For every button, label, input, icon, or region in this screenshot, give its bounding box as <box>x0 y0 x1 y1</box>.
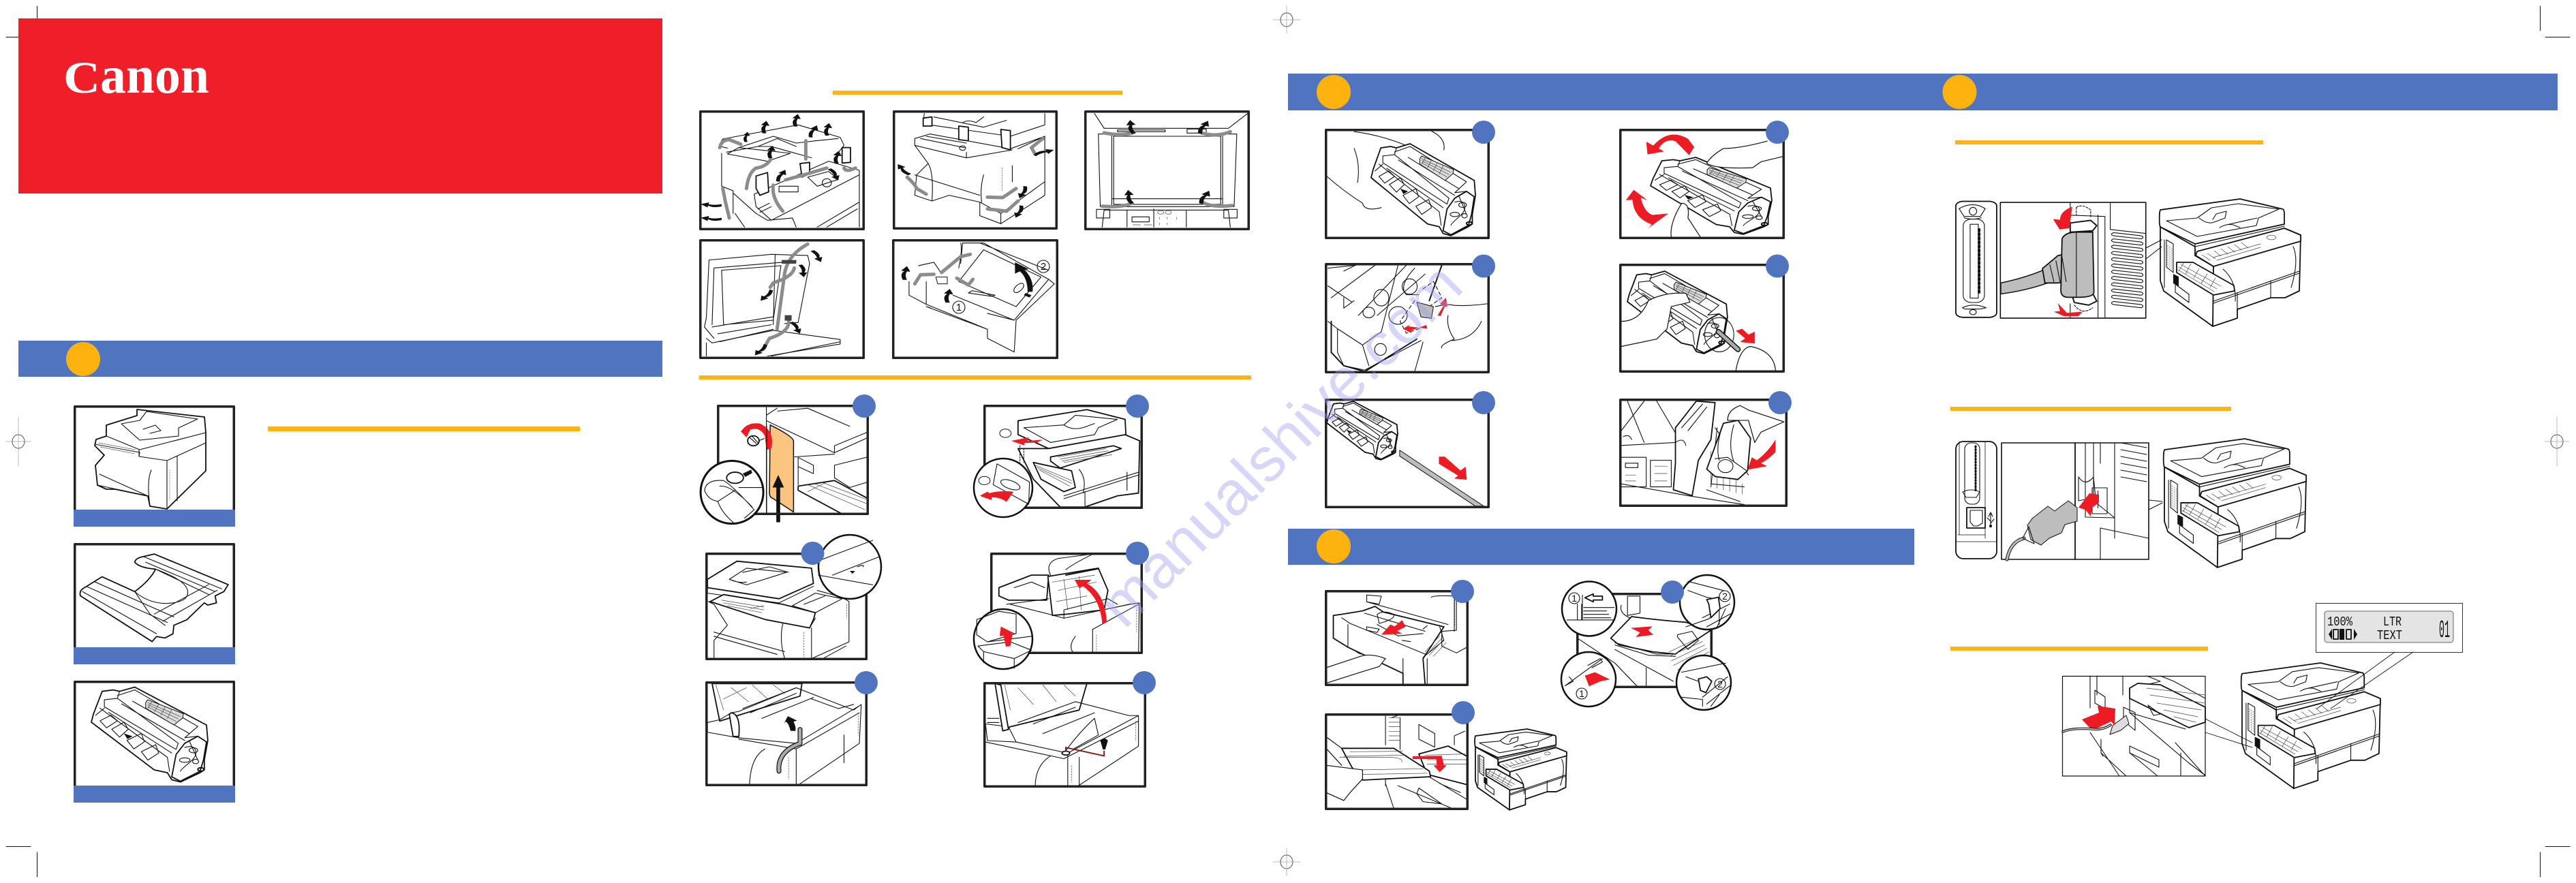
copier overview: parallel <box>2160 199 2301 326</box>
yellow rule: remove packing <box>833 91 1122 95</box>
red cover banner <box>18 18 662 193</box>
caption band <box>74 510 235 527</box>
panel: toner cartridge thumbnail <box>74 682 235 803</box>
number badge <box>1126 394 1149 418</box>
step 5: pull tape <box>707 671 878 785</box>
toner step 5: remove seal strip <box>1326 391 1495 507</box>
panel: remove tape scanner <box>701 112 863 229</box>
callout numbers: 1 <box>1579 688 1584 699</box>
callout numbers: 2 <box>1041 261 1046 273</box>
caption band <box>74 786 235 803</box>
leader lines: display and power <box>2205 652 2413 747</box>
yellow rule: USB connection <box>1950 407 2231 411</box>
step badge <box>66 342 100 376</box>
USB port <box>1967 508 1985 528</box>
paper step 2: load paper with details <box>1561 575 1734 710</box>
panel: output tray thumbnail <box>74 544 235 664</box>
copier overview: power <box>2241 663 2380 788</box>
yellow rule: package contents <box>268 427 580 431</box>
step badge <box>1317 75 1351 109</box>
paper step 3: attach output tray <box>1326 701 1567 810</box>
panel: USB connector port <box>1956 442 1997 559</box>
number badge <box>1451 580 1474 603</box>
yellow rule: parallel connection <box>1955 140 2263 144</box>
caption band <box>74 647 235 664</box>
display text: LTR <box>2383 615 2402 630</box>
panel: parallel cable detail <box>2000 202 2146 318</box>
callout numbers <box>1569 591 1730 699</box>
panel: parallel connector port <box>1956 202 1997 317</box>
number badge <box>1452 701 1475 724</box>
number badge <box>855 671 878 694</box>
toner step 3: bend seal tab <box>1326 255 1495 372</box>
magnifier: alignment mark <box>818 535 881 599</box>
number badge <box>853 394 876 418</box>
panel: remove cassette tape <box>893 241 1057 358</box>
magnifier: latch <box>974 609 1032 669</box>
Canon logo: C <box>63 53 100 103</box>
callout numbers: 1 <box>956 302 962 313</box>
section bar 3 <box>1288 529 1914 565</box>
step badge <box>1317 529 1351 563</box>
number badge <box>1126 542 1149 565</box>
number badge <box>1661 580 1684 604</box>
LCD display callout: 01 <box>2439 617 2450 645</box>
step 6: reinsert screw <box>985 671 1156 786</box>
toner step 6: insert cartridge <box>1621 391 1792 506</box>
LCD display callout <box>2316 604 2463 653</box>
magnifier: thumb screw <box>701 461 763 524</box>
callout numbers: 2 <box>1722 591 1728 602</box>
step 2: open cover and tab <box>974 394 1149 517</box>
number badge <box>801 542 825 565</box>
step 1: open panel and screw <box>701 394 876 524</box>
number badge <box>1472 121 1495 144</box>
display text <box>2327 615 2450 645</box>
toner step 4: pull tape out <box>1621 255 1789 371</box>
copier overview <box>1475 729 1567 810</box>
callout numbers <box>953 260 1049 313</box>
panel: power cord detail <box>2062 676 2205 776</box>
panel: USB cable detail <box>2002 443 2149 559</box>
magnifier: side tab <box>974 459 1032 517</box>
panel: remove lid tape <box>701 241 863 358</box>
step badge right <box>1942 75 1976 109</box>
number badge <box>1766 121 1789 144</box>
leader lines: USB <box>2149 500 2162 510</box>
step 3: front view with alignment detail <box>707 535 881 659</box>
copier overview: USB <box>2164 439 2306 568</box>
number badge <box>1472 391 1495 414</box>
magnifier: front guide <box>1676 655 1731 710</box>
contrast indicator <box>2329 629 2357 640</box>
yellow rule: power connection <box>1950 647 2208 651</box>
display text: 100% <box>2327 615 2352 630</box>
magnifier: paper stack limit <box>1562 582 1616 636</box>
panel: remove tape body <box>893 112 1056 228</box>
panel: remove glass tape <box>1086 112 1248 229</box>
magnifier: side guide <box>1561 652 1616 707</box>
section bar 2 spanning spread <box>1288 74 2558 110</box>
toner step 1: unpack cartridge <box>1326 121 1495 238</box>
number badge <box>1472 255 1495 278</box>
panel: copier contents thumbnail <box>74 407 235 527</box>
display panel <box>2325 611 2453 642</box>
toner step 2: rock cartridge <box>1621 121 1789 238</box>
leader lines: parallel <box>2146 240 2162 259</box>
watermark: manualshive.com <box>1086 250 1475 640</box>
callout numbers: 1 <box>1571 593 1577 604</box>
Canon logo: anon <box>100 46 209 104</box>
magnifier: rear guide <box>1680 575 1734 630</box>
number badge <box>1766 255 1789 278</box>
step 4: raise cover <box>974 542 1149 669</box>
display text: TEXT <box>2377 628 2402 643</box>
callout numbers: 2 <box>1717 679 1723 690</box>
section bar 1 <box>18 341 662 377</box>
number badge <box>1768 391 1792 414</box>
paper step 1: pull out cassette <box>1325 580 1474 685</box>
number badge <box>1133 671 1156 694</box>
yellow rule: install <box>699 375 1251 379</box>
